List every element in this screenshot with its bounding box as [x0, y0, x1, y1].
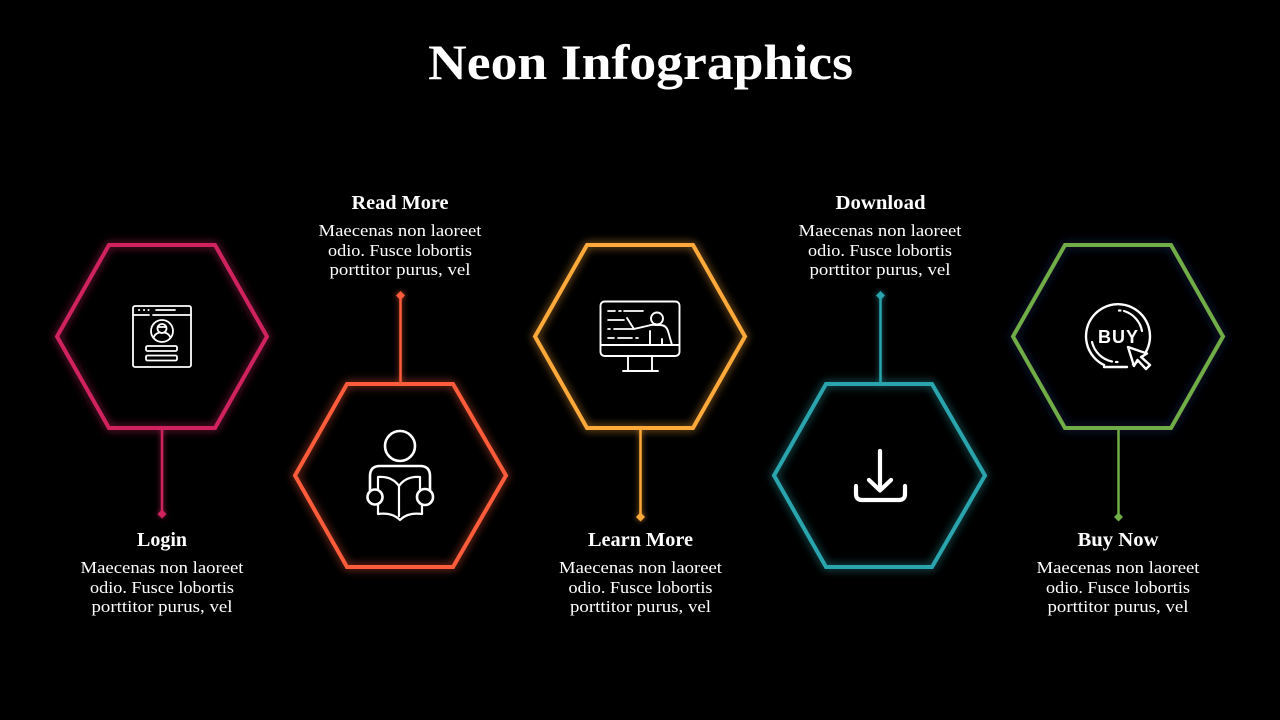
- label: read more: odio. Fusce lobortis: [328, 241, 472, 260]
- icon: buy button: BUY: [1098, 327, 1138, 347]
- label: download: Maecenas non laoreet: [798, 221, 962, 240]
- hexagon: read more: [295, 384, 506, 567]
- connector: buy now: [1114, 428, 1123, 522]
- label: learn more: porttitor purus, vel: [570, 597, 711, 616]
- label: read more: porttitor purus, vel: [330, 260, 471, 279]
- label: download: [798, 192, 962, 279]
- step 2: read more: [295, 192, 506, 567]
- connector: download: [876, 291, 885, 384]
- label: buy now: odio. Fusce lobortis: [1046, 578, 1190, 597]
- label: learn more: odio. Fusce lobortis: [568, 578, 712, 597]
- label: download: Download: [836, 192, 926, 214]
- icon: download arrow: [856, 451, 905, 500]
- step 4: download: [774, 192, 985, 567]
- step 3: learn more: [535, 245, 745, 616]
- hexagon: login: [57, 245, 267, 428]
- step 1: login: [57, 245, 267, 616]
- icon: login window: [133, 306, 191, 367]
- label: learn more: Maecenas non laoreet: [559, 558, 722, 577]
- connector: read more: [396, 291, 405, 384]
- hexagon: learn more: [535, 245, 745, 428]
- hexagon: download: [774, 384, 985, 567]
- label: login: Login: [137, 529, 188, 551]
- connector: learn more: [636, 428, 645, 522]
- label: read more: Maecenas non laoreet: [318, 221, 482, 240]
- label: login: porttitor purus, vel: [92, 597, 233, 616]
- label: download: porttitor purus, vel: [810, 260, 951, 279]
- connector: login: [158, 428, 166, 518]
- label: download: odio. Fusce lobortis: [808, 241, 952, 260]
- label: login: odio. Fusce lobortis: [90, 578, 234, 597]
- label: learn more: [559, 529, 722, 616]
- label: login: [80, 529, 244, 616]
- icon: buy button: [1086, 304, 1150, 369]
- label: learn more: Learn More: [588, 529, 693, 551]
- step 5: buy now: [1013, 245, 1223, 616]
- label: buy now: Buy Now: [1078, 529, 1159, 551]
- icon: presentation monitor: [600, 302, 680, 371]
- label: read more: [318, 192, 482, 279]
- label: login: Maecenas non laoreet: [80, 558, 244, 577]
- icon: person reading: [368, 431, 433, 520]
- label: buy now: porttitor purus, vel: [1048, 597, 1189, 616]
- label: read more: Read More: [352, 192, 448, 214]
- title: Neon Infographics: [428, 34, 853, 90]
- hexagon: buy now: [1013, 245, 1223, 428]
- label: buy now: [1036, 529, 1200, 616]
- label: buy now: Maecenas non laoreet: [1036, 558, 1200, 577]
